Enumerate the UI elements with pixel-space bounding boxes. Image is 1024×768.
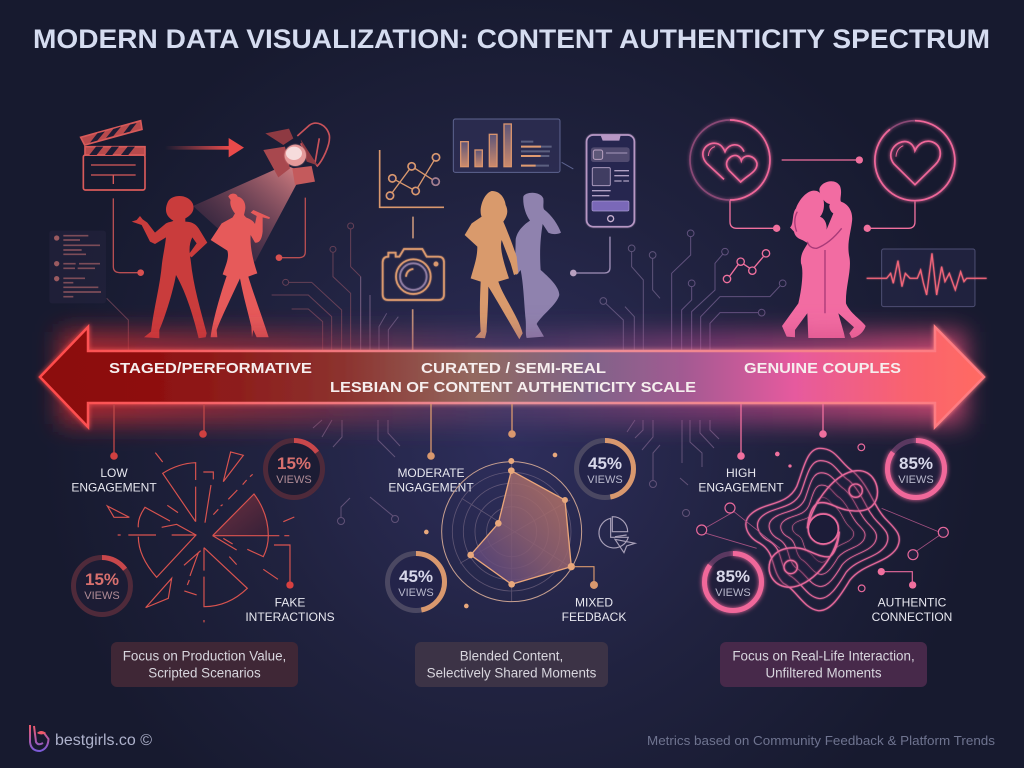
donut: 15 percent views upper: VIEWS xyxy=(276,474,312,486)
spectrum arrow xyxy=(40,327,984,427)
icon: mini line chart xyxy=(723,250,770,283)
figure: embracing couple xyxy=(782,181,866,338)
panel: genuine couples illustration xyxy=(690,120,987,338)
donut: 15 percent views lower: VIEWS xyxy=(84,590,120,602)
panel: low engagement metrics xyxy=(71,404,335,687)
circuit traces: upper right xyxy=(672,230,786,350)
circuit traces: lower band xyxy=(313,420,719,524)
arrow label: genuine: GENUINE COUPLES xyxy=(744,360,901,377)
arrow: clapper to spotlight xyxy=(165,138,244,157)
footer logo xyxy=(30,725,48,751)
arrow label: scale name: LESBIAN OF CONTENT AUTHENTICITY SCALE xyxy=(330,379,696,396)
donut: 45 percent views upper xyxy=(576,440,634,498)
panel: high engagement metrics xyxy=(697,404,952,687)
caption: production value xyxy=(111,642,298,687)
label: mixed feedback: FEEDBACK xyxy=(562,610,626,624)
icon: single heart ring xyxy=(875,121,955,201)
spotlight beam xyxy=(193,165,303,262)
label: fake interactions: INTERACTIONS xyxy=(245,610,335,624)
panel: staged performative illustration xyxy=(49,121,330,338)
donut: 15 percent views lower xyxy=(74,558,130,614)
icon: line chart xyxy=(380,150,444,350)
icon: smartphone xyxy=(587,135,634,227)
icon: pie chart with cursor xyxy=(599,517,635,553)
donut: 85 percent views upper: 85% xyxy=(899,454,933,473)
label: authentic connection: AUTHENTIC xyxy=(878,596,947,610)
panel: curated illustration xyxy=(380,119,634,350)
caption: blended content: Selectively Shared Moments xyxy=(427,666,597,680)
connector: phone xyxy=(570,237,610,276)
donut: 85 percent views upper xyxy=(888,440,944,498)
caption: blended content: Blended Content, xyxy=(460,648,563,664)
caption: blended content xyxy=(415,642,608,687)
donut: 85 percent views lower: 85% xyxy=(716,567,750,586)
label: moderate engagement: ENGAGEMENT xyxy=(388,480,474,494)
label: mixed feedback: MIXED xyxy=(575,596,613,610)
icon: camera xyxy=(383,249,444,300)
circuit traces: upper middle xyxy=(361,245,660,350)
caption: real-life interaction: Focus on Real-Life Interaction, xyxy=(732,648,915,664)
icon: clapperboard xyxy=(81,121,145,190)
icon: spotlight xyxy=(263,123,330,185)
donut: 45 percent views upper: 45% xyxy=(588,454,622,473)
donut: 45 percent views lower xyxy=(388,554,444,610)
donut: 15 percent views upper xyxy=(266,440,322,498)
label: high engagement: ENGAGEMENT xyxy=(698,480,784,494)
label: authentic connection: CONNECTION xyxy=(872,610,952,624)
panel: moderate engagement metrics xyxy=(388,404,635,687)
bar chart panel xyxy=(453,119,573,172)
chart: radar xyxy=(424,453,598,608)
icon: double heart ring xyxy=(690,120,770,200)
arrow glow xyxy=(60,332,965,424)
donut: 45 percent views upper: VIEWS xyxy=(587,474,623,486)
label: fake interactions: FAKE xyxy=(275,596,305,610)
caption: production value: Scripted Scenarios xyxy=(148,666,261,680)
donut: 45 percent views lower: VIEWS xyxy=(398,587,434,599)
donut: 85 percent views lower: VIEWS xyxy=(715,587,751,599)
donut: 45 percent views lower: 45% xyxy=(399,567,433,586)
icon: heartbeat monitor xyxy=(867,249,987,307)
caption: real-life interaction: Unfiltered Moments xyxy=(765,666,882,680)
connector pins xyxy=(110,404,207,460)
title: MODERN DATA VISUALIZATION: CONTENT AUTHENTICITY SPECTRUM xyxy=(33,24,990,54)
label: high engagement: HIGH xyxy=(726,466,756,480)
label: low engagement: LOW xyxy=(100,466,128,480)
connector pins xyxy=(737,404,827,460)
donut: 15 percent views lower: 15% xyxy=(85,570,119,589)
icon: script document panel xyxy=(49,231,106,303)
caption: real-life interaction xyxy=(720,642,927,687)
connector pins xyxy=(427,404,516,460)
footer brand: bestgirls.co © xyxy=(55,732,153,749)
figure: woman gesturing xyxy=(132,196,207,338)
figure: woman with microphone xyxy=(211,194,270,337)
caption: production value: Focus on Production Value, xyxy=(123,648,286,664)
chart: shattered pie xyxy=(107,452,294,622)
chart: organic contour network xyxy=(697,444,948,611)
connector lines between hearts xyxy=(730,156,915,232)
figure: woman in orange xyxy=(465,191,523,339)
donut: 15 percent views upper: 15% xyxy=(277,454,311,473)
circuit traces: upper left xyxy=(107,223,370,350)
connector lines xyxy=(113,198,305,276)
donut: 85 percent views upper: VIEWS xyxy=(898,474,934,486)
donut: 85 percent views lower xyxy=(704,554,762,610)
label: low engagement: ENGAGEMENT xyxy=(71,480,157,494)
figure: woman in purple xyxy=(515,193,561,338)
arrow label: curated: CURATED / SEMI-REAL xyxy=(421,360,606,377)
arrow label: staged: STAGED/PERFORMATIVE xyxy=(109,360,312,377)
label: moderate engagement: MODERATE xyxy=(397,466,465,480)
footer note: Metrics based on Community Feedback & Platform Trends xyxy=(647,733,996,748)
